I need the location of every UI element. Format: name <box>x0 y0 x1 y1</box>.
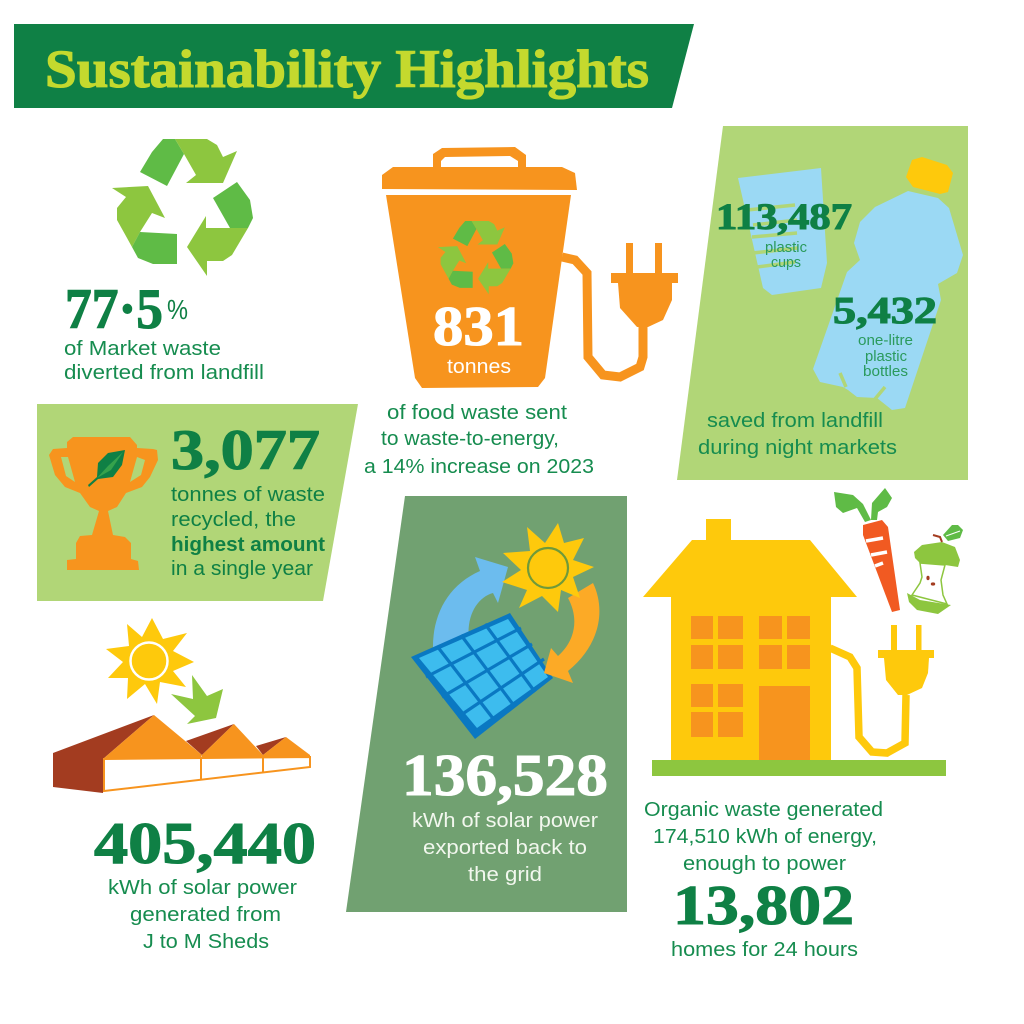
description: the grid <box>468 863 542 886</box>
panel: solar generated <box>53 618 316 953</box>
title banner <box>14 24 694 108</box>
statistic: 113,487: 113,487 <box>716 197 852 238</box>
icon: plastic cup <box>738 168 827 295</box>
statistic: 831 tonnes: 831 <box>433 296 524 358</box>
bottles label: bottles <box>863 363 908 380</box>
percent sign: % <box>167 294 188 325</box>
cups label: plastic <box>765 239 807 256</box>
icon: sun <box>502 523 594 612</box>
icon: apple core <box>907 525 963 614</box>
statistic: 13,802: 13,802 <box>673 875 854 937</box>
description: in a single year <box>171 557 313 580</box>
description: 174,510 kWh of energy, <box>653 825 877 848</box>
description: highest amount <box>171 533 325 556</box>
description: kWh of solar power <box>108 876 297 899</box>
description: during night markets <box>698 436 897 459</box>
description: saved from landfill <box>707 409 883 432</box>
description: J to M Sheds <box>143 930 269 953</box>
icon: power cord and plug <box>562 243 678 377</box>
bottles label: plastic <box>865 348 907 365</box>
panel: food waste bin <box>364 147 678 478</box>
icon: plastic bottle <box>813 157 963 410</box>
description: diverted from landfill <box>64 361 264 384</box>
icon: orange arrow <box>544 583 599 683</box>
icon: trophy with leaf <box>49 437 158 570</box>
description: Organic waste generated <box>644 798 883 821</box>
panel: waste diverted <box>64 139 264 384</box>
title: Sustainability Highlights <box>45 39 649 99</box>
description: generated from <box>130 903 281 926</box>
description: of food waste sent <box>387 401 567 424</box>
icon: carrot <box>834 488 900 612</box>
cups label: cups <box>771 254 801 271</box>
description: exported back to <box>423 836 587 859</box>
statistic: 77.5%: 77·5 <box>65 278 163 341</box>
panel: organic waste energy <box>643 488 963 961</box>
icon: sheds <box>53 715 310 793</box>
icon: power cord and plug <box>830 625 934 753</box>
description: kWh of solar power <box>412 809 598 832</box>
statistic: 136,528: 136,528 <box>402 742 608 808</box>
icon: recycling arrows <box>112 139 253 276</box>
panel: plastic saved <box>677 126 968 480</box>
icon: bin <box>382 147 577 388</box>
panel: solar exported <box>346 496 627 912</box>
bottles label: one-litre <box>858 332 913 349</box>
description: tonnes of waste <box>171 483 325 506</box>
description: enough to power <box>683 852 846 875</box>
description: recycled, the <box>171 508 296 531</box>
statistic: 405,440: 405,440 <box>94 810 316 876</box>
statistic: 5,432: 5,432 <box>833 290 937 332</box>
icon: house <box>643 519 857 760</box>
icon: solar panel <box>411 613 553 739</box>
icon: arrow <box>171 675 223 724</box>
icon: sun <box>106 618 194 704</box>
unit: tonnes <box>447 356 511 378</box>
description: a 14% increase on 2023 <box>364 455 594 478</box>
icon: small recycling arrows <box>438 221 513 294</box>
panel: waste recycled <box>37 404 358 601</box>
caption: homes for 24 hours <box>671 938 858 961</box>
description: to waste-to-energy, <box>381 427 559 450</box>
statistic: 3,077: 3,077 <box>171 419 320 482</box>
description: of Market waste <box>64 337 221 360</box>
icon: ground <box>652 760 946 776</box>
icon: blue arrow <box>433 557 508 650</box>
